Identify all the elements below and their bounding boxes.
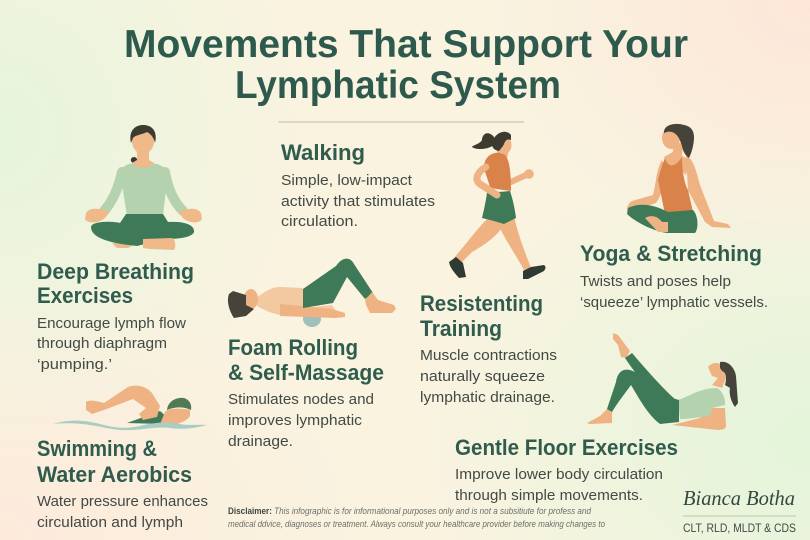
- heading: deep breathing: Deep Breathing: [37, 259, 194, 284]
- body text: deep breathing: [37, 316, 187, 373]
- body text: swimming: Water pressure enhances: [37, 494, 208, 510]
- icon: swimmer: [53, 386, 207, 430]
- heading: foam rolling: & Self-Massage: [228, 360, 384, 385]
- body text: foam rolling: [228, 392, 374, 450]
- panel: foam rolling: [228, 259, 396, 450]
- heading: deep breathing: [37, 259, 194, 308]
- body text: resistance training: [420, 348, 557, 406]
- body text: deep breathing: Encourage lymph flow: [37, 316, 187, 332]
- title: Movements That Support Your: [124, 23, 688, 66]
- heading: foam rolling: [228, 335, 384, 385]
- icon: seated meditation figure: [85, 125, 202, 250]
- heading: resistenting training: Training: [420, 316, 502, 341]
- heading: swimming: Water Aerobics: [37, 462, 192, 487]
- heading: resistenting training: Resistenting: [420, 291, 543, 316]
- body text: gentle floor exercises: [455, 467, 663, 504]
- body text: resistance training: Muscle contractions: [420, 348, 557, 364]
- body text: yoga: Twists and poses help: [580, 274, 731, 290]
- panel: yoga: [580, 124, 768, 311]
- body text: walking: [281, 173, 435, 230]
- heading: deep breathing: Exercises: [37, 283, 133, 308]
- body text: swimming: circulation and lymph: [37, 515, 183, 531]
- body text: foam rolling: Stimulates nodes and: [228, 392, 374, 408]
- body text: resistance training: lymphatic drainage.: [420, 390, 555, 406]
- heading: swimming: [37, 436, 192, 487]
- body text: gentle floor exercises: through simple movements.: [455, 488, 643, 504]
- icon: figure on foam roller: [228, 259, 396, 327]
- heading: foam rolling: Foam Rolling: [228, 335, 358, 360]
- body text: walking: activity that stimulates: [281, 194, 435, 210]
- heading: yoga and stretching: Yoga & Stretching: [580, 241, 762, 266]
- body text: foam rolling: drainage.: [228, 434, 293, 450]
- body text: swimming: [37, 494, 208, 531]
- body text: resistance training: naturally squeeze: [420, 369, 545, 385]
- body text: deep breathing: ‘pumping.’: [37, 357, 112, 373]
- icon: reclining leg raise figure: [587, 333, 738, 430]
- disclaimer: medical ddvice, diagnoses or treatment. Always consult your healthcare provider before making changes to: [228, 519, 605, 529]
- panel: swimming: [37, 386, 208, 531]
- disclaimer: [228, 506, 605, 529]
- heading: swimming: Swimming &: [37, 436, 157, 461]
- heading: gentle floor exercises: Gentle Floor Exercises: [455, 435, 678, 460]
- icon: running figure: [449, 132, 545, 279]
- body text: foam rolling: improves lymphatic: [228, 413, 362, 429]
- signature: author credentials: CLT, RLD, MLDT & CDS: [683, 523, 796, 535]
- disclaimer: Disclaimer: This infographic is for informational purposes only and is not a subsitiute for profess and: [228, 506, 592, 516]
- title: Lymphatic System: [235, 64, 561, 107]
- body text: deep breathing: through diaphragm: [37, 336, 167, 352]
- body text: yoga: ‘squeeze’ lymphatic vessels.: [580, 295, 768, 311]
- icon: seated twist figure: [627, 124, 731, 233]
- panel: deep breathing: [37, 125, 202, 373]
- panel: resistance training: [420, 291, 557, 406]
- body text: yoga: [580, 274, 768, 311]
- body text: walking: Simple, low-impact: [281, 173, 412, 189]
- panel: gentle floor exercises: [455, 333, 738, 504]
- body text: gentle floor exercises: Improve lower body circulation: [455, 467, 663, 483]
- body text: walking: circulation.: [281, 214, 358, 230]
- heading: walking: Walking: [281, 140, 365, 165]
- signature: author credentials: Bianca Botha: [683, 486, 795, 510]
- heading: resistenting training: [420, 291, 543, 341]
- signature: author credentials: [683, 486, 796, 535]
- title: [124, 23, 688, 107]
- panel: walking: [281, 132, 545, 279]
